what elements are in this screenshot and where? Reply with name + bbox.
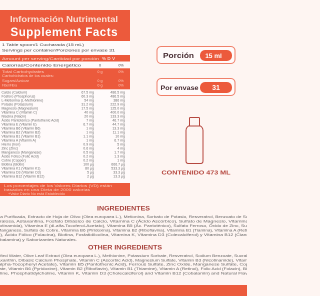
- nutrient rows: 400.0 mg: [110, 111, 125, 115]
- nutrient rows: Vitamina B12 (Vitamin B12): [2, 175, 44, 179]
- heading: ingredientes: INGREDIENTES: [97, 206, 151, 212]
- nutrient rows: 1.7 mg: [114, 151, 125, 155]
- carbohydrates block: [0, 68, 130, 89]
- nutrient rows: 60.3 mg: [81, 95, 94, 99]
- nutrient rows: Vitamina D3 (Vitamin D3): [2, 171, 41, 175]
- nutrient rows: 11.1 mg: [113, 131, 125, 135]
- nutrient rows: 533.3 µg: [111, 167, 125, 171]
- nutrient rows: 7 mg: [86, 119, 94, 123]
- nutrient rows: 46.7 mg: [112, 119, 125, 123]
- nutrient rows: 486.5 mg: [110, 91, 125, 95]
- nutrient rows: 80 µg: [85, 167, 94, 171]
- nutrient rows: 1.3 mg: [114, 155, 125, 159]
- nutrient rows: 13.3 mg: [112, 127, 125, 131]
- badge: porción: Porción: [163, 53, 194, 60]
- nutrient rows: 0.2 mg: [83, 159, 94, 163]
- serving size text: 1 Table spoon/1 Cucharada (15 mL): [2, 43, 84, 47]
- carbohydrates block: 0 g: [97, 83, 103, 87]
- nutrient rows: 1 mg: [117, 159, 125, 163]
- calories row: Calorías/Contenido Energético: [2, 63, 81, 67]
- text: spanish ingredients: [0, 215, 257, 242]
- nutrient rows: Hierro (Iron): [2, 143, 20, 147]
- nutrient rows: 13.3 µg: [113, 175, 125, 179]
- amount per serving bar: %DV: [102, 56, 115, 61]
- carbohydrates block: Sugars/Azúcar: [2, 79, 30, 83]
- nutrient rows: 222.9 mg: [110, 103, 125, 107]
- carbohydrates block: 0%: [118, 83, 124, 87]
- nutrient rows: 44.7 mg: [112, 123, 125, 127]
- nutrient rows: Vitamina K1 (Vitamin K1): [2, 167, 40, 171]
- nutrient rows: [2, 91, 125, 179]
- nutrient rows: Vitamina B6 (Vitamin B6): [2, 127, 40, 131]
- header: title band: Supplement Facts: [10, 27, 118, 39]
- nutrient rows: Vitamina A (Vitamin A): [2, 139, 36, 143]
- nutrient rows: Fósforo (Phosphorus): [2, 95, 35, 99]
- text: spanish ingredients: balamina) y Saborizantes Naturales.: [0, 238, 77, 242]
- nutrient rows: 0.5 mg: [83, 151, 94, 155]
- nutrient rows: Vitamina B2 (Vitamin B2): [2, 131, 40, 135]
- footnote band: basados en una Dieta de 2000 calorías: [4, 187, 90, 192]
- nutrient rows: 6.7 mg: [114, 139, 125, 143]
- text: english ingredients: [0, 254, 257, 276]
- badge: por envase: Por envase: [160, 86, 199, 92]
- nutrient rows: Zinc (Zinc): [2, 147, 18, 151]
- nutrient rows: 33.3 µg: [113, 171, 125, 175]
- amount per serving bar: Amount per serving/Cantidad por porción: [2, 57, 99, 61]
- carbohydrates block: 0%: [118, 79, 124, 83]
- carbohydrates block: 0%: [118, 70, 124, 74]
- nutrient rows: Calcio (Calcium): [2, 91, 27, 95]
- nutrient rows: 67.5 mg: [81, 91, 94, 95]
- carbohydrates block: Fiber/Fibra: [2, 83, 18, 87]
- nutrient rows: Cobre (Copper): [2, 159, 26, 163]
- carbohydrates block: 0 g: [97, 79, 103, 83]
- panel: nutrition facts table: [0, 10, 130, 196]
- nutrient rows: 133.3 mg: [110, 115, 125, 119]
- nutrient rows: 20 mg: [84, 115, 94, 119]
- nutrient rows: Magnesio (Magnesium): [2, 107, 38, 111]
- icon: bottle: [186, 118, 203, 164]
- nutrient rows: 386 mg: [113, 99, 125, 103]
- badge: por envase: [157, 78, 235, 96]
- badge: porción: [157, 46, 235, 64]
- serving size text: [2, 43, 115, 52]
- carbohydrates block: 0 g: [97, 70, 103, 74]
- amount per serving bar: [0, 55, 130, 62]
- nutrient rows: Biotina (Biotin): [2, 163, 24, 167]
- nutrient rows: 125.0 mg: [110, 107, 125, 111]
- calories row: [2, 63, 124, 67]
- nutrient rows: Vitamina B1 (Vitamin B1): [2, 135, 40, 139]
- footnote band: Los porcentajes de los Valores Diarios (VD) están: [4, 183, 112, 188]
- nutrient rows: Vitamina C (Vitamin C): [2, 111, 37, 115]
- footnote band: +Valor Diario No está Establecido: [8, 191, 65, 196]
- calories row: 0%: [118, 63, 124, 67]
- nutrient rows: 17.5 mg: [81, 107, 94, 111]
- carbohydrates block: Total Carbohydrates: [2, 70, 44, 74]
- nutrient rows: 5 mg: [117, 143, 125, 147]
- footnote band: [0, 183, 130, 196]
- nutrient rows: 2 µg: [87, 175, 94, 179]
- nutrient rows: 31.2 mg: [81, 103, 94, 107]
- nutrient rows: 100 µg: [83, 163, 94, 167]
- nutrient rows: 666.7 µg: [111, 163, 125, 167]
- nutrient rows: 0.2 mg: [83, 155, 94, 159]
- nutrient rows: Ácido Fólico (Folic Acid): [2, 155, 39, 159]
- nutrient rows: 0.9 mg: [83, 143, 94, 147]
- badge: porción: 15 ml: [205, 53, 222, 60]
- nutrient rows: 4 mg: [117, 147, 125, 151]
- nutrient rows: 40 mg: [84, 111, 94, 115]
- nutrient rows: 1 mg: [86, 131, 94, 135]
- carbohydrates block: Carbohidratos de los cuales:: [2, 74, 54, 78]
- nutrient rows: 1 mg: [86, 139, 94, 143]
- nutrient rows: Niacina (Niacin): [2, 115, 26, 119]
- nutrient rows: 6.7 mg: [83, 123, 94, 127]
- badge: por envase: 31: [212, 85, 220, 92]
- header: title band: [0, 10, 130, 41]
- nutrient rows: L-Metionina (L-Methionine): [2, 99, 43, 103]
- nutrient rows: 486.5 mg: [110, 95, 125, 99]
- nutrient rows: 1 mg: [86, 127, 94, 131]
- serving size text: Servings per container/Porciones por envase 31: [2, 48, 115, 52]
- nutrient rows: 10 mg: [115, 135, 125, 139]
- nutrient rows: 0.6 mg: [83, 147, 94, 151]
- heading: other ingredients: OTHER INGREDIENTS: [88, 244, 163, 252]
- nutrient rows: Manganeso (Manganese): [2, 151, 41, 155]
- calories row: 0: [99, 63, 101, 67]
- bottle content label: CONTENIDO 473 ML: [162, 170, 231, 176]
- header: title band: Información Nutrimental: [10, 15, 118, 24]
- nutrient rows: 54 mg: [84, 99, 94, 103]
- nutrient rows: 5 µg: [87, 171, 94, 175]
- nutrient rows: Vitamina E (Vitamin E): [2, 123, 37, 127]
- footer band: [0, 285, 247, 296]
- nutrient rows: Potasio (Potassium): [2, 103, 33, 107]
- nutrient rows: 1.1 mg: [83, 135, 94, 139]
- nutrient rows: Ácido Pantoténico (Pantothenic Acid): [2, 119, 59, 123]
